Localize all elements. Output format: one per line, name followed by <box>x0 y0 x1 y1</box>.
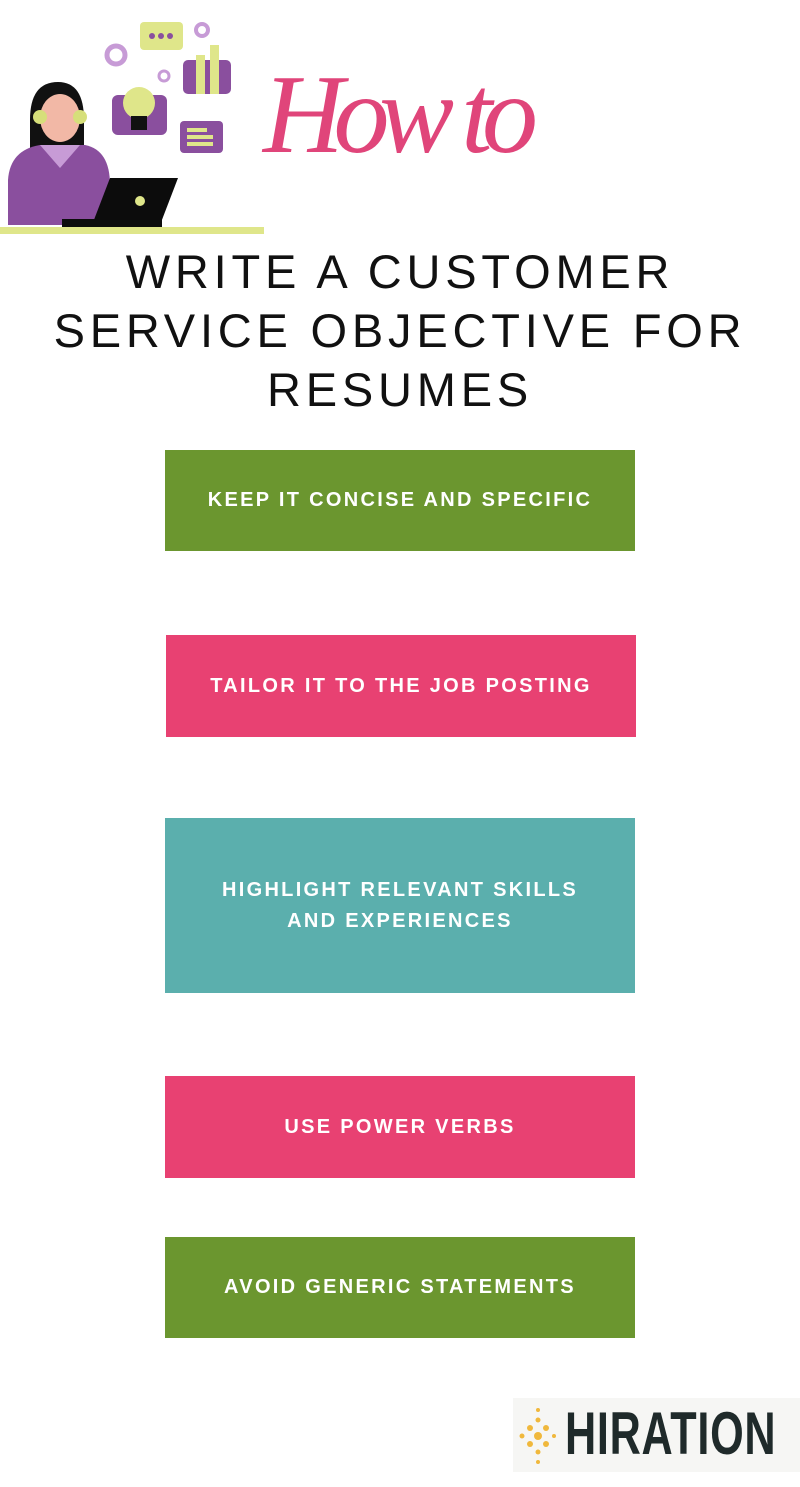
logo: Hiration <box>513 1398 800 1472</box>
illustration: customer service agent <box>0 22 264 234</box>
face <box>40 94 80 142</box>
chart bubble <box>183 60 231 94</box>
step 2 <box>166 635 636 737</box>
step 2: TAILOR IT TO THE JOB POSTING <box>210 674 592 696</box>
text bubble <box>180 121 223 153</box>
desk line <box>0 227 264 234</box>
dots bubble <box>140 22 183 50</box>
laptop <box>92 178 178 225</box>
headset <box>33 110 47 124</box>
title: RESUMES <box>267 363 533 416</box>
step 3: HIGHLIGHT RELEVANT SKILLS <box>222 878 578 900</box>
hair <box>30 82 84 160</box>
bulb bubble <box>112 95 167 135</box>
title: WRITE A CUSTOMER <box>126 245 674 298</box>
title: SERVICE OBJECTIVE FOR <box>54 304 746 357</box>
title <box>54 245 746 416</box>
logo text: HIRATION <box>565 1400 776 1467</box>
step 5 <box>165 1237 635 1338</box>
step 3 <box>165 818 635 993</box>
step 1: KEEP IT CONCISE AND SPECIFIC <box>208 489 592 511</box>
step 1 <box>165 450 635 551</box>
step 4: USE POWER VERBS <box>284 1116 516 1138</box>
step 4 <box>165 1076 635 1178</box>
logo icon dots <box>520 1408 556 1464</box>
gears <box>107 46 125 64</box>
step 3: AND EXPERIENCES <box>287 910 513 932</box>
body <box>8 145 110 225</box>
step 5: AVOID GENERIC STATEMENTS <box>224 1276 576 1298</box>
